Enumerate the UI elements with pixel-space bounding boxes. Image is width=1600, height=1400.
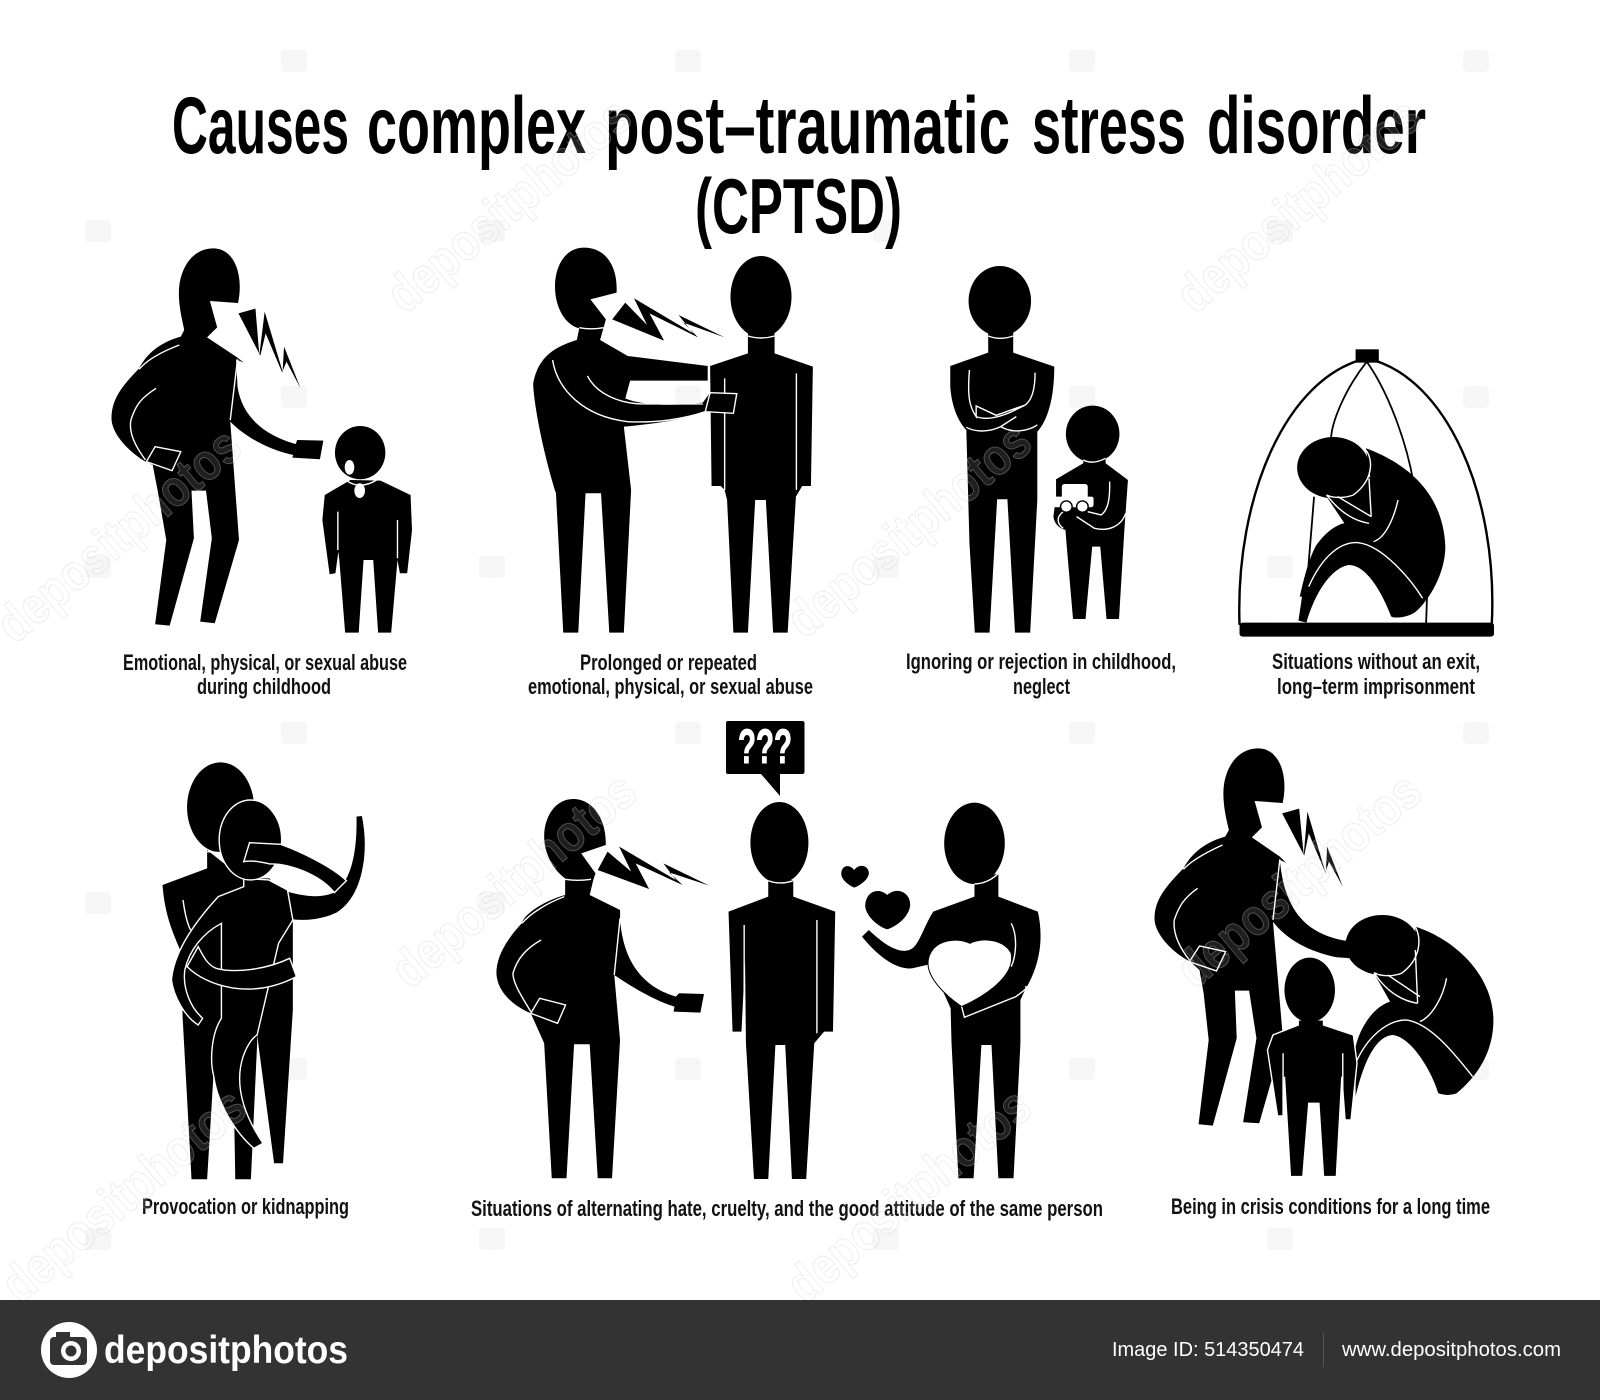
caption: situations without an exit: long–term imprisonment bbox=[1277, 674, 1476, 699]
icon: cage bbox=[1239, 349, 1494, 637]
caption: ignoring or rejection: neglect bbox=[1013, 674, 1070, 699]
figure: child with toy bbox=[1052, 406, 1128, 619]
figure: shouting adult bbox=[112, 248, 323, 626]
panel: emotional, physical, or sexual abuse during childhood bbox=[112, 248, 412, 633]
figure: person holding heart bbox=[862, 803, 1041, 1178]
caption: situations without an exit bbox=[1272, 649, 1480, 699]
figure: confused person bbox=[729, 802, 835, 1179]
caption: abuse during childhood: Emotional, physical, or sexual abuse bbox=[123, 650, 407, 675]
caption: prolonged abuse: Prolonged or repeated bbox=[580, 650, 757, 675]
website url: www.depositphotos.com bbox=[1341, 1339, 1561, 1361]
figure: adult with crossed arms bbox=[950, 266, 1054, 633]
caption: abuse during childhood bbox=[123, 650, 407, 699]
callout: question speech bubble: ??? bbox=[738, 721, 792, 774]
icon: camera logo bbox=[41, 1322, 97, 1378]
figure: kidnapped person in back bbox=[162, 762, 293, 1179]
figure: listening person bbox=[710, 256, 813, 633]
watermark text: depositphotos bbox=[775, 412, 1043, 649]
title: post–traumatic bbox=[605, 81, 1010, 171]
title: stress bbox=[1032, 81, 1186, 171]
caption: being in crisis conditions: Being in crisis conditions for a long time bbox=[1171, 1194, 1490, 1219]
figure: crouching person bbox=[1346, 915, 1493, 1097]
watermark text: depositphotos bbox=[775, 1077, 1043, 1314]
callout: question speech bubble bbox=[726, 721, 804, 796]
title: Causes bbox=[172, 81, 349, 171]
watermark text: depositphotos bbox=[380, 762, 648, 999]
caption: abuse during childhood: during childhood bbox=[197, 674, 331, 699]
watermark text: depositphotos bbox=[375, 87, 643, 324]
icon: shout lightning bbox=[1282, 809, 1343, 887]
icon: small heart bbox=[841, 866, 869, 888]
figure: shouting person bbox=[496, 799, 709, 1178]
watermark text bbox=[0, 87, 1433, 1314]
watermark text: depositphotos bbox=[1165, 87, 1433, 324]
figure: kidnapper in front bbox=[171, 800, 365, 1148]
title: (CPTSD) bbox=[695, 162, 902, 250]
figure: shouting person bbox=[533, 248, 737, 633]
panel: ignoring or rejection in childhood bbox=[950, 266, 1128, 633]
panel: provocation or kidnapping bbox=[162, 762, 365, 1179]
footer bar bbox=[0, 1300, 1600, 1400]
figure: crying child bbox=[322, 426, 412, 633]
image id: Image ID: 514350474 bbox=[1112, 1339, 1304, 1361]
figure: crouching person bbox=[1297, 437, 1445, 623]
logo wordmark: depositphotos bbox=[104, 1329, 348, 1372]
icon: shout lightning bbox=[238, 309, 301, 388]
caption: provocation or kidnapping: Provocation or kidnapping bbox=[142, 1194, 349, 1219]
caption: ignoring or rejection bbox=[906, 649, 1176, 699]
panel: prolonged or repeated abuse bbox=[533, 248, 813, 633]
title: complex bbox=[367, 81, 586, 171]
icon: shout lightning bbox=[598, 847, 709, 889]
caption: situations without an exit: Situations without an exit, bbox=[1272, 649, 1480, 674]
icon: large heart bbox=[865, 891, 910, 929]
caption: alternating hate and good attitude: Situations of alternating hate, cruelty, and the good attitude of the same person bbox=[471, 1196, 1103, 1221]
figure: child bbox=[1267, 958, 1357, 1177]
caption: ignoring or rejection: Ignoring or rejection in childhood, bbox=[906, 649, 1176, 674]
panel: alternating hate and good attitude bbox=[496, 721, 1041, 1179]
icon: shout lightning bbox=[612, 298, 725, 341]
icon: toy car bbox=[1052, 484, 1094, 512]
caption: prolonged abuse: emotional, physical, or sexual abuse bbox=[528, 674, 813, 699]
panel: being in crisis conditions bbox=[1155, 748, 1493, 1177]
title bbox=[172, 81, 1426, 250]
caption: prolonged abuse bbox=[528, 650, 813, 699]
title: disorder bbox=[1207, 81, 1426, 171]
figure: shouting adult bbox=[1155, 748, 1351, 1126]
watermark text: depositphotos bbox=[1165, 762, 1433, 999]
panel: situations without an exit bbox=[1239, 349, 1494, 637]
